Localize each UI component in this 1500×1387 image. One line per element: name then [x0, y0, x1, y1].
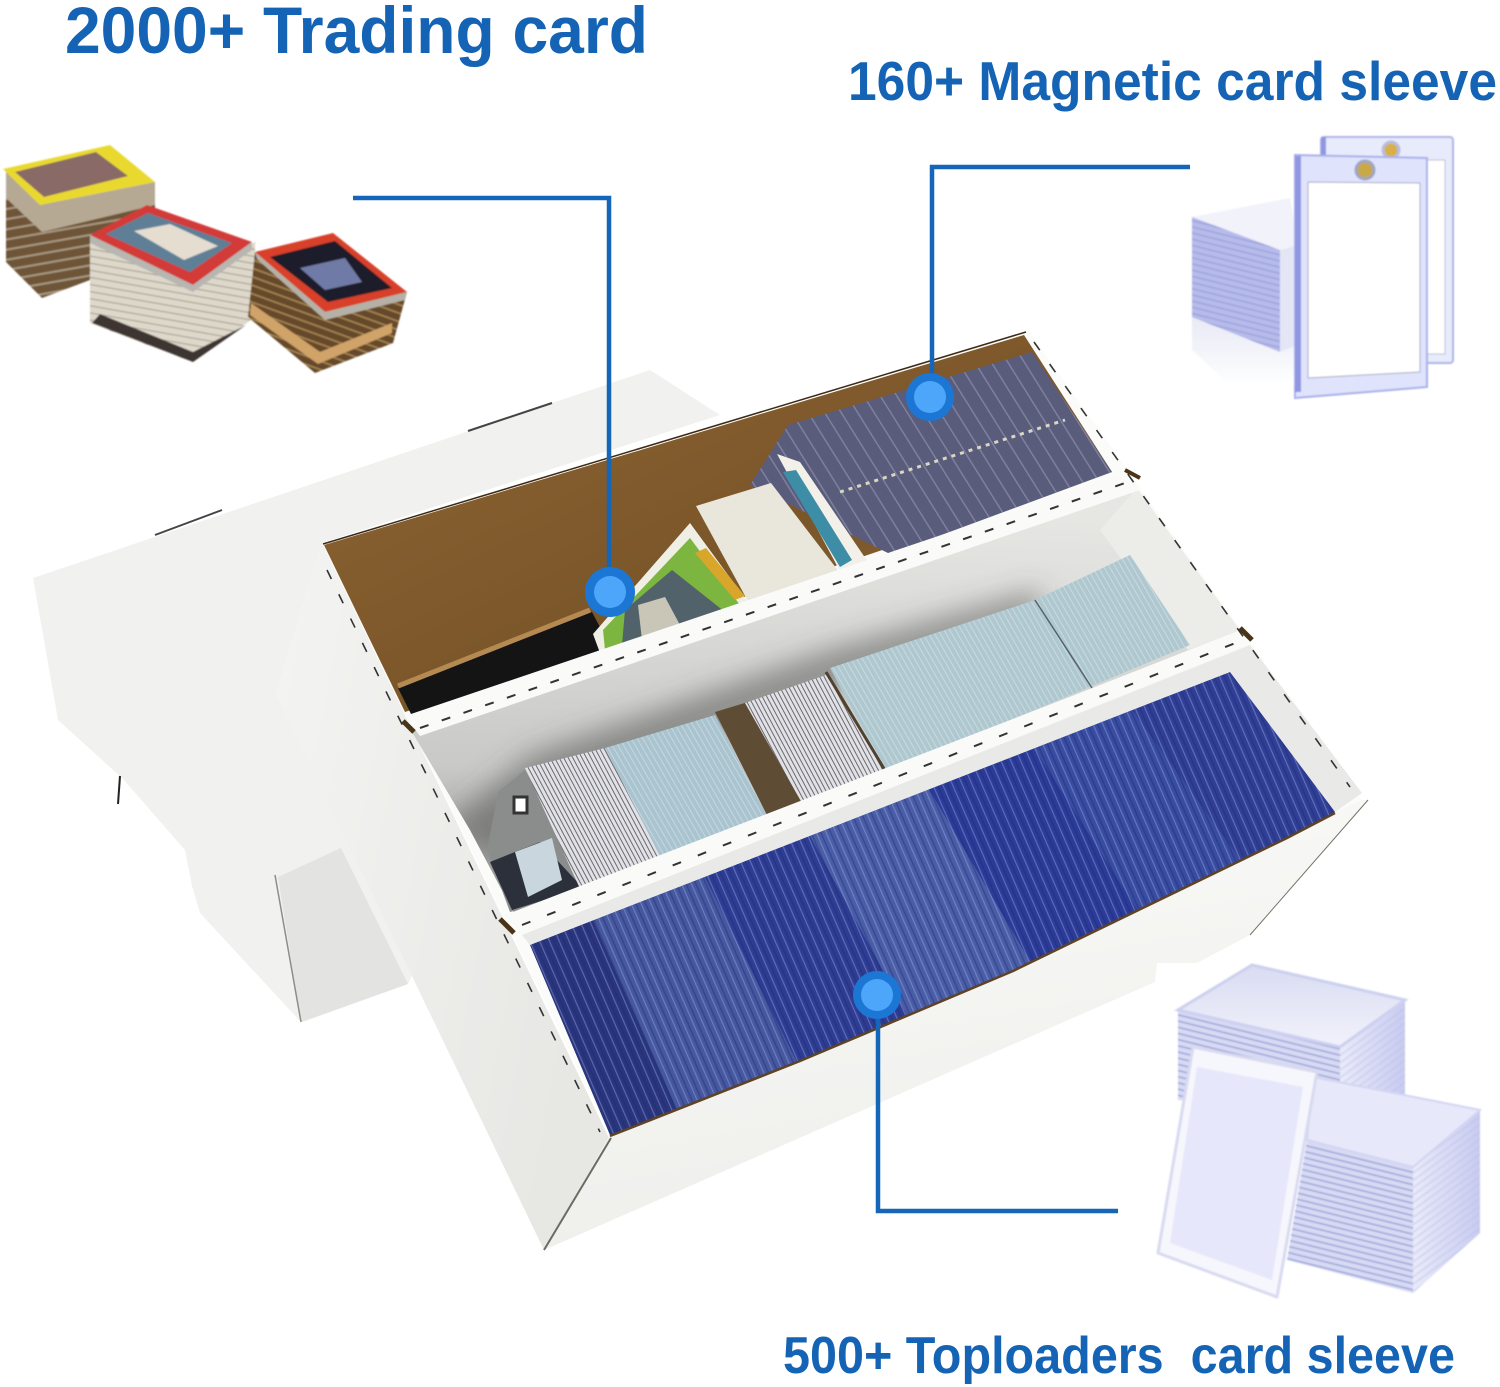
grey card stack right — [745, 675, 886, 810]
brewers card — [777, 454, 870, 575]
pale blue stack left — [605, 715, 772, 860]
stack one — [3, 145, 155, 298]
box top rim — [322, 330, 1362, 1135]
rear compartment back wall — [324, 335, 1112, 712]
marker: magnetic sleeve — [906, 373, 954, 421]
image: magnetic card sleeves — [1192, 137, 1453, 398]
front compartment brown edge — [610, 813, 1335, 1136]
player card — [487, 770, 583, 912]
box front wall — [544, 800, 1368, 1250]
right inner wall — [1100, 488, 1240, 650]
storage box — [276, 330, 1368, 1250]
marker: toploader — [853, 971, 901, 1019]
divider wall — [412, 488, 1240, 915]
front compartment inner walls — [522, 645, 1362, 945]
brown stack — [715, 702, 806, 825]
front divider rim — [505, 632, 1250, 935]
lid front face — [278, 848, 408, 1022]
rear divider rim — [405, 473, 1140, 736]
front compartment toploaders — [530, 672, 1350, 1160]
pale blue stack right — [830, 555, 1190, 772]
white card stack — [696, 483, 840, 605]
red sox card — [593, 523, 750, 653]
magnetic sleeves in box — [750, 352, 1112, 554]
callout: trading card leader line — [353, 198, 635, 617]
callout: magnetic sleeve leader line — [906, 167, 1190, 421]
stack three — [248, 233, 407, 373]
title: toploaders card sleeve: 500+ Toploaders card sleeve — [783, 1327, 1455, 1385]
single toploader — [1158, 1047, 1317, 1297]
grey card stack left — [525, 748, 662, 893]
image: toploader sleeves — [1158, 965, 1480, 1297]
left wall stitch marks — [327, 570, 600, 1132]
lid top and left faces — [33, 370, 720, 1022]
marker: trading card — [585, 567, 635, 617]
rear compartment dark floor — [398, 612, 612, 716]
front toploader stack — [1287, 1077, 1480, 1293]
middle compartment cards — [487, 555, 1190, 912]
box left wall — [276, 543, 611, 1250]
rear toploader stack — [1178, 965, 1405, 1110]
image: trading card stacks — [3, 145, 407, 373]
stack two — [90, 205, 255, 362]
sleeve stack — [1192, 198, 1300, 385]
rear sleeve — [1321, 137, 1453, 363]
right wall stitch marks — [1034, 342, 1350, 787]
callout: toploader leader line — [853, 971, 1118, 1211]
storage box lid — [33, 370, 720, 1022]
front sleeve — [1295, 155, 1427, 398]
